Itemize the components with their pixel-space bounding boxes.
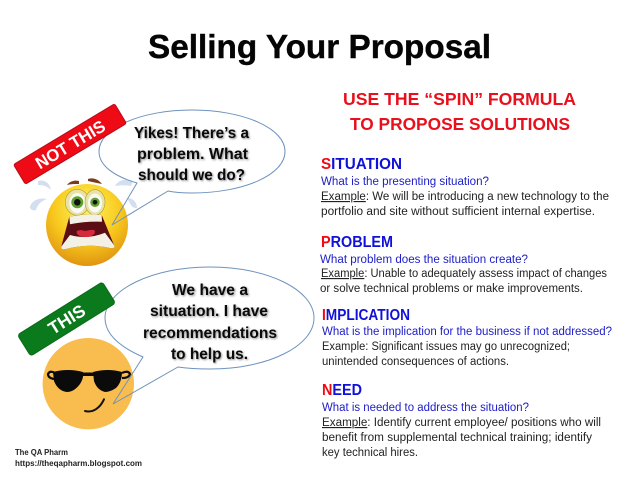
icon: panicked emoji <box>30 178 137 266</box>
label: this <box>17 282 116 356</box>
section: situation <box>321 156 609 218</box>
section: problem: PROBLEM <box>321 234 393 251</box>
bubble text: to help us. <box>171 346 248 363</box>
section: need: key technical hires. <box>322 447 418 459</box>
bubble text <box>134 125 249 184</box>
bubble text: should we do? <box>138 167 245 184</box>
section: implication: IMPLICATION <box>322 307 410 324</box>
section: need: benefit from supplemental technical training; identify <box>322 432 592 444</box>
section: need: NEED <box>322 382 362 399</box>
section: problem: What problem does the situation create? <box>320 254 528 266</box>
section: implication: What is the implication for the business if not addressed? <box>322 326 612 338</box>
bubble text: Yikes! There’s a <box>134 125 249 142</box>
label: this: THIS <box>45 300 89 339</box>
section: situation: portfolio and site without sufficient internal expertise. <box>321 206 595 218</box>
label: not this: NOT THIS <box>32 117 109 173</box>
section: problem <box>320 234 607 295</box>
section: situation: What is the presenting situation? <box>321 176 489 188</box>
section: implication <box>322 307 612 368</box>
section: situation: Example: We will be introducing a new technology to the <box>321 191 609 203</box>
section: implication: unintended consequences of actions. <box>322 356 509 368</box>
speech bubble: yikes <box>99 110 285 225</box>
section: need: What is needed to address the situation? <box>322 402 529 414</box>
section: problem: Example: Unable to adequately assess impact of changes <box>321 268 607 280</box>
bubble text: We have a <box>172 282 248 299</box>
heading: spin formula: TO PROPOSE SOLUTIONS <box>350 114 570 134</box>
section: situation: SITUATION <box>321 156 402 173</box>
title: Selling Your Proposal <box>148 29 491 66</box>
footer credit <box>15 448 142 468</box>
bubble text <box>143 282 277 363</box>
footer credit: https://theqapharm.blogspot.com <box>15 459 142 468</box>
label: not this <box>14 104 126 184</box>
bubble text: recommendations <box>143 325 277 342</box>
panel: not this example <box>14 104 285 266</box>
section: need <box>322 382 601 459</box>
bubble text: situation. I have <box>150 303 268 320</box>
section: problem: or solve technical problems or make improvements. <box>320 283 583 295</box>
heading: spin formula: USE THE “SPIN” FORMULA <box>343 89 576 109</box>
icon: cool sunglasses emoji <box>43 338 134 429</box>
panel: this example <box>17 267 314 429</box>
speech bubble: we have a situation <box>105 267 314 404</box>
footer credit: The QA Pharm <box>15 448 68 457</box>
section: implication: Example: Significant issues may go unrecognized; <box>322 341 570 353</box>
bubble text: problem. What <box>137 146 248 163</box>
section: need: Example: Identify current employee/ positions who will <box>322 417 601 429</box>
heading: spin formula <box>343 89 576 134</box>
